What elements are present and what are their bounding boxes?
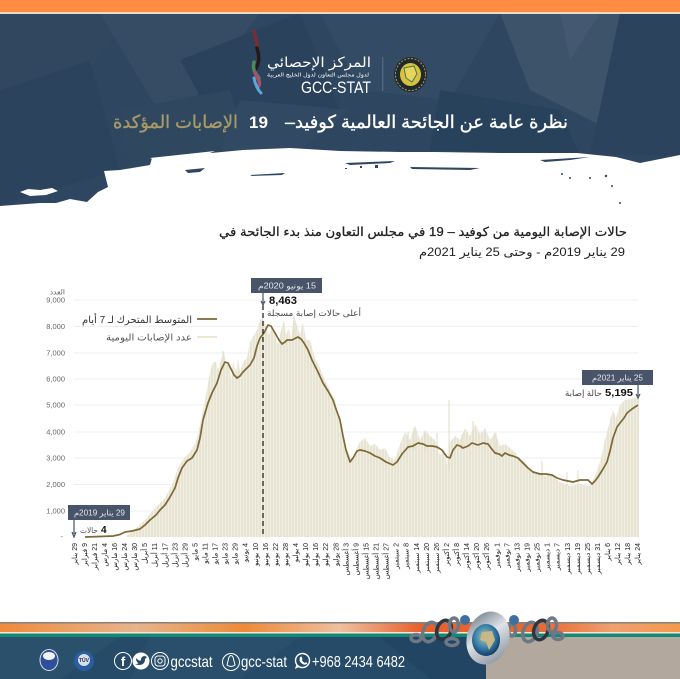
- x axis date labels: 12 يناير: [615, 543, 622, 566]
- callout: 25 January 2021: [565, 370, 653, 399]
- x axis date labels: 24 مارس: [122, 543, 129, 571]
- panel: footer: [0, 606, 680, 679]
- callout: 29 January 2019: حالات: [80, 526, 98, 535]
- y axis labels: -: [60, 532, 64, 541]
- x axis date labels: 2 سبتمبر: [394, 543, 400, 570]
- x axis date labels: 20 أكتوبر: [472, 543, 481, 571]
- x axis date labels: 5 مايو: [192, 543, 200, 561]
- x axis date labels: 16 مارس: [112, 543, 119, 571]
- x axis date labels: 19 ديسمبر: [575, 543, 582, 575]
- logo Arabic subtitle: لدول مجلس التعاون لدول الخليج العربية: [267, 72, 369, 78]
- x axis date labels: 31 ديسمبر: [595, 543, 602, 575]
- x axis date labels: 18 يناير: [625, 543, 632, 566]
- callout: peak 15 June 2020: أعلى حالات إصابة مسجلة: [267, 307, 361, 319]
- x axis date labels: 4 يوليو: [293, 543, 300, 563]
- x axis date labels: 27 أغسطس: [382, 543, 390, 579]
- x axis date labels: 29 يناير: [72, 543, 79, 566]
- x axis date labels: 3 أغسطس: [342, 543, 350, 575]
- top orange bar: [0, 0, 680, 14]
- icon: instagram: [152, 652, 168, 670]
- x axis date labels: 8 أكتوبر: [452, 543, 461, 567]
- logo ribbon: [253, 31, 261, 93]
- x axis date labels: 17 أبريل: [160, 543, 170, 568]
- x axis date labels: 4 مارس: [102, 543, 109, 567]
- handle: gcc-stat: gcc-stat: [241, 654, 287, 671]
- logo Arabic name: المركز الإحصائي: [267, 54, 371, 71]
- icon: twitter: [132, 652, 150, 670]
- legend: moving average: المتوسط المتحرك لـ 7 أيام: [82, 313, 192, 326]
- x axis date labels: 16 يوليو: [313, 543, 320, 567]
- callout: 29 January 2019: [68, 505, 130, 537]
- x axis date labels: 7 ديسمبر: [554, 543, 562, 571]
- chart heading: [219, 225, 627, 260]
- x axis date labels: [72, 543, 642, 579]
- handle: gccstat: gccstat: [170, 654, 213, 671]
- title: [113, 112, 568, 133]
- legend: [82, 313, 217, 344]
- brush stroke streaks: [185, 157, 621, 204]
- title white segment: نظرة عامة عن الجائحة العالمية كوفيد–: [285, 112, 568, 133]
- callout: peak 15 June 2020: [251, 278, 361, 319]
- icon: badge 2: [74, 651, 94, 671]
- y axis labels: 1,000: [46, 506, 65, 516]
- x axis date labels: 24 يناير: [635, 543, 642, 566]
- x axis date labels: 29 مايو: [232, 543, 240, 565]
- x axis date labels: 16 يونيو: [263, 543, 270, 567]
- daily cases bars: [125, 316, 639, 537]
- callout: 25 January 2021: 25 يناير 2021م: [592, 374, 644, 382]
- x axis date labels: 7 نوفمبر: [504, 543, 512, 569]
- x axis date labels: 26 سبتمبر: [434, 543, 441, 574]
- x axis date labels: 9 أغسطس: [352, 543, 360, 575]
- icon: facebook: [114, 652, 132, 670]
- x axis date labels: 10 يوليو: [303, 543, 310, 567]
- x axis date labels: 28 يوليو: [334, 543, 340, 567]
- x axis date labels: 30 مارس: [132, 543, 139, 571]
- title number: 19: [249, 113, 268, 132]
- title gold segment: الإصابات المؤكدة: [113, 112, 238, 133]
- x axis date labels: 13 نوفمبر: [514, 543, 522, 573]
- x axis date labels: 25 نوفمبر: [534, 543, 542, 573]
- y axis labels: العدد: [50, 288, 65, 296]
- white brush stroke edge: [0, 148, 680, 220]
- chart: daily COVID-19 cases: [46, 278, 653, 579]
- heading line 2: 29 يناير 2019م - وحتى 25 يناير 2021م: [419, 245, 625, 260]
- callout: 29 January 2019: 4: [101, 525, 107, 536]
- seven-day moving average line: [85, 325, 638, 537]
- x axis date labels: 1 نوفمبر: [494, 543, 502, 569]
- logo: GCC-STAT: [253, 31, 427, 97]
- x axis date labels: 19 نوفمبر: [524, 543, 532, 573]
- x axis date labels: 22 يوليو: [323, 543, 330, 567]
- x axis date labels: 21 أغسطس: [372, 543, 380, 579]
- x axis date labels: 5 أبريل: [140, 543, 149, 564]
- x axis date labels: 11 مايو: [202, 543, 210, 565]
- y axis labels: 4,000: [46, 428, 65, 436]
- x axis date labels: 17 مايو: [212, 543, 220, 565]
- x axis date labels: 11 أبريل: [150, 543, 159, 567]
- icon: facebook: f: [121, 654, 126, 669]
- callout: 25 January 2021: 5,195: [605, 387, 633, 399]
- y axis labels: 6,000: [46, 374, 65, 384]
- icon: whatsapp: [295, 654, 310, 669]
- x axis date labels: 4 يونيو: [242, 543, 250, 563]
- x axis date labels: 2 أكتوبر: [442, 543, 451, 567]
- x axis date labels: 10 يونيو: [253, 543, 260, 567]
- icon: badge 1: [40, 650, 58, 670]
- x axis date labels: 13 ديسمبر: [565, 543, 572, 575]
- x axis date labels: 9 فبراير: [82, 543, 89, 567]
- y axis labels: 7,000: [46, 348, 65, 358]
- legend: daily cases: عدد الإصابات اليومية: [106, 332, 192, 344]
- x axis date labels: 29 أبريل: [180, 543, 190, 568]
- heading line 1: حالات الإصابة اليومية من كوفيد – 19 في مجلس التعاون منذ بدء الجائحة في: [219, 225, 627, 240]
- x axis date labels: 20 سبتمبر: [424, 543, 431, 574]
- x axis date labels: 21 فبراير: [92, 543, 99, 571]
- phone number: +968 2434 6482: [312, 654, 405, 671]
- y axis labels: 2,000: [46, 480, 65, 489]
- dashed peak marker: [262, 305, 264, 537]
- y axis labels: [46, 288, 65, 541]
- x axis date labels: 8 سبتمبر: [404, 543, 410, 570]
- icon: snapchat: [222, 654, 240, 670]
- x axis date labels: 14 أكتوبر: [462, 543, 471, 571]
- x axis date labels: 26 أكتوبر: [482, 543, 491, 571]
- y axis labels: 8,000: [46, 322, 65, 331]
- x axis date labels: 6 يناير: [605, 543, 612, 562]
- callout: peak 15 June 2020: 8,463: [269, 295, 297, 307]
- y axis labels: 3,000: [46, 454, 65, 462]
- x axis date labels: 22 يونيو: [273, 543, 280, 567]
- y axis labels: 5,000: [46, 400, 65, 410]
- x axis date labels: 1 ديسمبر: [544, 543, 552, 571]
- icon: chain emblem with globe: [411, 606, 563, 670]
- icon: GCC emblem: [394, 57, 427, 92]
- y axis labels: 9,000: [46, 296, 65, 304]
- callout: peak 15 June 2020: 15 يونيو 2020م: [258, 282, 317, 290]
- x axis date labels: 28 يونيو: [283, 543, 290, 567]
- x axis date labels: 23 أبريل: [170, 543, 180, 568]
- icon: badge 2: TÜV: [79, 657, 90, 664]
- callout: 29 January 2019: 29 يناير 2019م: [74, 508, 126, 518]
- x axis date labels: 23 مايو: [222, 543, 230, 565]
- callout: 25 January 2021: حالة إصابة: [565, 388, 602, 399]
- logo GCC-STAT wordmark: GCC-STAT: [301, 79, 371, 97]
- panel: header banner: [0, 13, 680, 208]
- x axis date labels: 25 ديسمبر: [585, 543, 592, 575]
- x axis date labels: 14 سبتمبر: [414, 543, 421, 574]
- x axis date labels: 15 أغسطس: [362, 543, 370, 579]
